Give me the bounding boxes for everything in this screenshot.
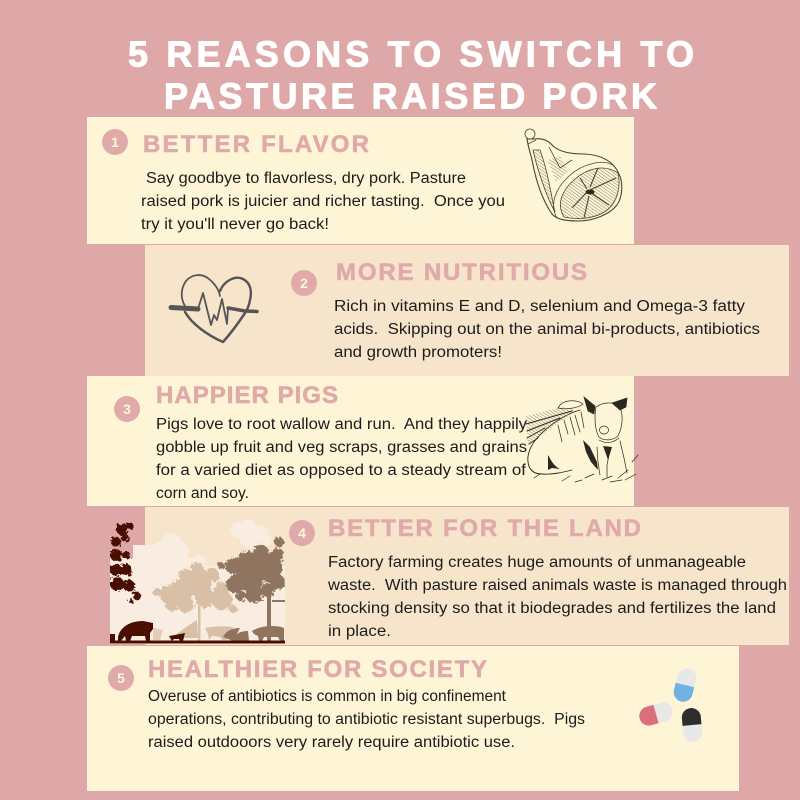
ground strip: [110, 640, 285, 644]
heading: healthier for society: HEALTHIER FOR SOCIETY: [148, 656, 487, 683]
blue pill: [672, 666, 698, 704]
number badge 1: 1: [111, 134, 119, 150]
pale pig: [153, 628, 163, 640]
text: healthier for society: operations, contributing to antibiotic resistant superbugs. Pigs: [148, 711, 585, 728]
number badge 1: [102, 129, 128, 155]
text: more nutritious: acids. Skipping out on the animal bi-products, antibiotics: [334, 321, 760, 338]
text: better flavor: Say goodbye to flavorless, dry pork. Pasture: [146, 170, 466, 187]
tan pigs: [177, 620, 198, 638]
heading: happier pigs: HAPPIER PIGS: [156, 382, 338, 409]
small dark pig at edge: [110, 634, 115, 641]
number badge 5: 5: [117, 670, 125, 686]
black pill: [681, 707, 703, 743]
text: better for the land: [327, 554, 787, 640]
dark left tree: [110, 522, 141, 604]
text: healthier for society: [148, 688, 585, 751]
title: [128, 34, 694, 116]
text: more nutritious: [334, 298, 760, 361]
panel: better for the land: [110, 507, 789, 645]
panel: better flavor: [87, 117, 634, 244]
text: healthier for society: Overuse of antibiotics is common in big confinement: [148, 688, 507, 705]
text: happier pigs: Pigs love to root wallow and run. And they happily: [156, 416, 527, 433]
number badge 3: [114, 396, 140, 422]
number badge 2: [291, 270, 317, 296]
number badge 2: 2: [300, 275, 308, 291]
title: PASTURE RAISED PORK: [164, 76, 657, 116]
panel: more nutritious: [145, 245, 789, 376]
text: better flavor: [141, 170, 505, 233]
icon: pills: [637, 666, 703, 743]
title: 5 REASONS TO SWITCH TO: [128, 34, 694, 74]
number badge 3: 3: [123, 401, 131, 417]
brown right tree: [218, 537, 285, 641]
text: more nutritious: Rich in vitamins E and D, selenium and Omega-3 fatty: [334, 298, 745, 315]
text: better for the land: waste. With pasture raised animals waste is managed through: [327, 577, 787, 594]
icon: pig sketch: [526, 397, 638, 482]
icon: ham: [525, 129, 622, 221]
text: happier pigs: corn and soy.: [156, 485, 249, 502]
pigs silhouettes: [110, 620, 284, 641]
text: better for the land: stocking density so that it biodegrades and fertilizes the land: [328, 600, 776, 617]
number badge 4: [289, 520, 315, 546]
illustration: pigs in orchard landscape: [110, 519, 285, 644]
panel: healthier for society: [87, 646, 739, 791]
heading: more nutritious: MORE NUTRITIOUS: [336, 259, 587, 286]
icon: heart with pulse line: [171, 275, 257, 342]
red pill: [637, 700, 675, 728]
text: happier pigs: [156, 416, 527, 502]
mid brown pigs: [233, 631, 249, 640]
text: healthier for society: raised outdooors very rarely require antibiotic use.: [148, 734, 515, 751]
panel: happier pigs: [87, 376, 638, 506]
large dark pig: [118, 621, 153, 641]
text: better flavor: raised pork is juicier and richer tasting. Once you: [141, 193, 505, 210]
small dark piglet: [169, 633, 185, 641]
text: more nutritious: and growth promoters!: [334, 344, 502, 361]
text: better for the land: in place.: [328, 623, 391, 640]
number badge 5: [108, 665, 134, 691]
tan middle tree: [152, 562, 237, 641]
text: better flavor: try it you'll never go back!: [141, 216, 329, 233]
text: happier pigs: gobble up fruit and veg scraps, grasses and grains: [156, 439, 527, 456]
pale sky and clouds: [110, 519, 285, 644]
text: better for the land: Factory farming creates huge amounts of unmanageable: [328, 554, 746, 571]
heading: better for the land: BETTER FOR THE LAND: [328, 515, 641, 542]
text: happier pigs: for a varied diet as opposed to a steady stream of: [156, 462, 527, 479]
heading: better flavor: BETTER FLAVOR: [143, 131, 369, 158]
number badge 4: 4: [298, 525, 306, 541]
brown pig: [252, 626, 284, 641]
